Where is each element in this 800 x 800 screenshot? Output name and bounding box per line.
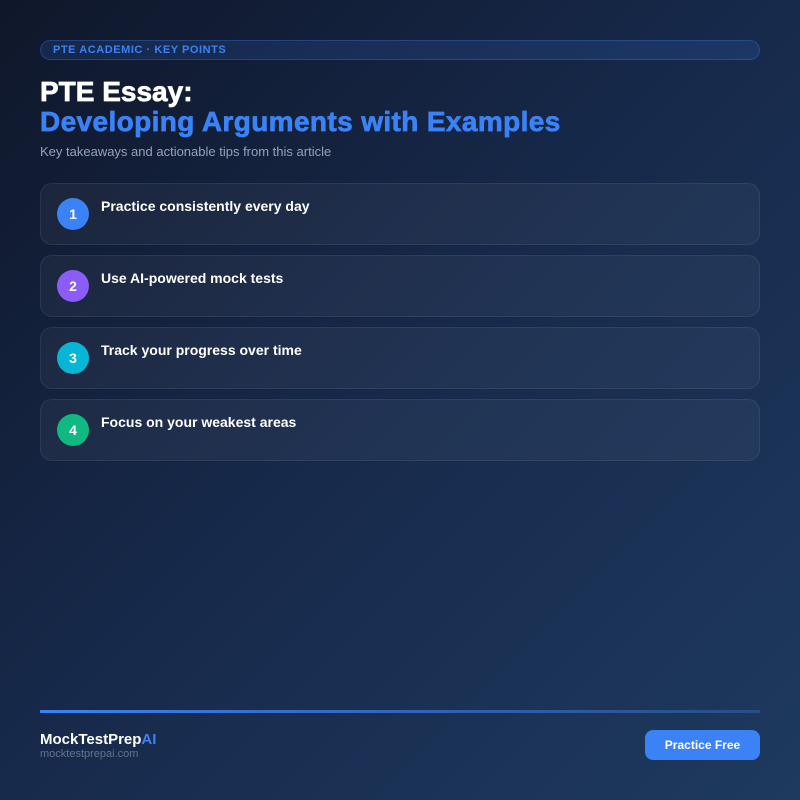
tip 3 text: Track your progress over time bbox=[101, 342, 302, 358]
icon: number 1 bbox=[57, 198, 89, 230]
footer accent line bbox=[40, 710, 760, 713]
badge: category label bbox=[40, 40, 760, 60]
panel: tip 3 bbox=[40, 327, 760, 389]
icon: number 4: 4 bbox=[69, 422, 77, 438]
button: practice free: Practice Free bbox=[665, 738, 740, 752]
brand name: MockTestPrepAI bbox=[40, 731, 156, 748]
icon: number 2: 2 bbox=[69, 278, 77, 294]
icon: number 3: 3 bbox=[69, 350, 77, 366]
panel: tip 1 bbox=[40, 183, 760, 245]
icon: number 2 bbox=[57, 270, 89, 302]
panel: tip 2 bbox=[40, 255, 760, 317]
brand url: mocktestprepai.com bbox=[40, 748, 138, 760]
tip 1 text: Practice consistently every day bbox=[101, 198, 310, 214]
icon: number 1: 1 bbox=[69, 206, 77, 222]
panel: tip 4 bbox=[40, 399, 760, 461]
title: Developing Arguments with Examples bbox=[40, 106, 561, 137]
title: PTE Essay: bbox=[40, 76, 193, 106]
title bbox=[40, 76, 561, 138]
icon: number 4 bbox=[57, 414, 89, 446]
icon: number 3 bbox=[57, 342, 89, 374]
tip 4 text: Focus on your weakest areas bbox=[101, 414, 296, 430]
tip 2 text: Use AI-powered mock tests bbox=[101, 270, 283, 286]
subtitle: Key takeaways and actionable tips from this article bbox=[40, 144, 331, 159]
badge: category label: PTE ACADEMIC · KEY POINTS bbox=[53, 44, 226, 56]
button: practice free bbox=[645, 730, 760, 760]
